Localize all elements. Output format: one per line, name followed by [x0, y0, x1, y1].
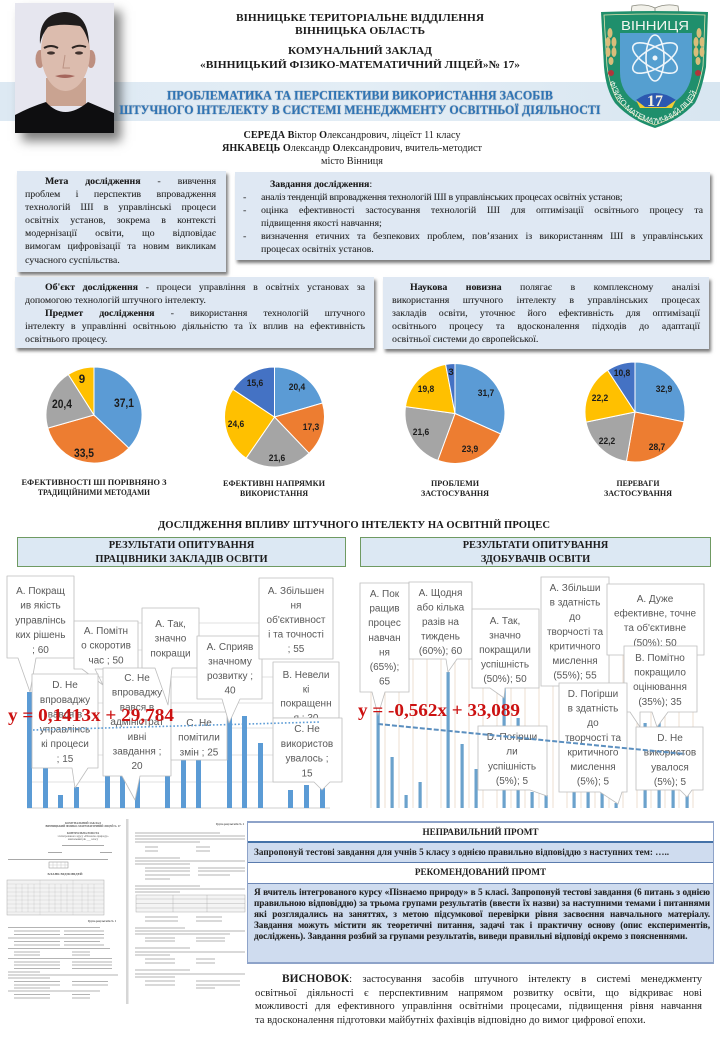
callout: was not used: використов — [644, 748, 696, 759]
callout: not used: 15 — [301, 768, 313, 779]
authors block: ЯНКАВЕЦЬ Олександр Олександрович, вчитель-методист — [222, 143, 482, 154]
callout: improved learning: навчан — [368, 633, 401, 644]
pie chart: effective directions of use: 20,4 — [289, 382, 306, 393]
pie captions: ЕФЕКТИВНОСТІ ШІ ПОРІВНЯНО З — [22, 478, 167, 487]
callout: improved learning: 65 — [379, 677, 390, 688]
heading: organisation lines: КОМУНАЛЬНИЙ ЗАКЛАД — [288, 45, 433, 57]
conclusion text — [255, 973, 702, 1026]
survey header: students: ЗДОБУВАЧІВ ОСВІТИ — [481, 554, 590, 565]
callout: not implemented in administration: впроваджу — [112, 688, 162, 699]
panel: scientific novelty — [383, 277, 709, 349]
callout: noticed no change — [171, 712, 227, 760]
panel: object and subject of research: Предмет дослідження - використання технологій штучного — [45, 308, 365, 319]
callout: contributed to development: розвитку ; — [207, 671, 253, 682]
pie chart: effective directions of use: 15,6 — [247, 378, 263, 389]
pie chart: application advantages: 22,2 — [592, 393, 608, 404]
pie captions: ВИКОРИСТАННЯ — [240, 489, 308, 498]
callout: improved performance — [472, 609, 539, 698]
callout: improved assessment: оцінювання — [633, 682, 687, 693]
row: recommended prompt text: Я вчитель інтегрованого курсу «Пізнаємо природу» в 5 класі. Запропонуй тестові завдання (6 питань з однією — [254, 887, 710, 897]
panel: scientific novelty: освітнього процесу та вдосконалення підходів до адаптації — [392, 321, 700, 332]
panel: research tasks: аналіз тенденцій впровадження технологій ШІ в управлінських процесах освітніх установ; — [261, 192, 622, 203]
callout: very effective — [607, 584, 704, 655]
callout: increased objectivity: ; 55 — [288, 644, 305, 655]
callout: saved time: А. Помітн — [84, 626, 128, 637]
test document scan: КОМУНАЛЬНИЙ ЗАКЛАД — [65, 822, 101, 825]
callout: improved decisions — [7, 576, 74, 692]
callout: improved learning: ня — [379, 647, 390, 658]
callout: not used — [273, 718, 342, 790]
heading: organisation lines — [200, 12, 520, 71]
callout: increased objectivity: ня — [291, 600, 301, 612]
row: recommended prompt text: Завдання можуть містити як теоретичні питання, задачі так і практичну основу (опис експериментів, — [254, 920, 710, 930]
authors block: СЕРЕДА Віктор Олександрович, ліцеїст 11 класу — [244, 130, 460, 141]
callout: improved learning: А. Пок — [370, 589, 400, 600]
callout: performance worsened: ли — [506, 747, 518, 758]
callout: very effective: А. Дуже — [637, 594, 674, 605]
pie chart: application problems: 21,6 — [413, 427, 429, 438]
callout: not implemented in management: впроваджу — [40, 695, 90, 706]
pie chart: application problems: 3 — [448, 367, 454, 378]
panel: research tasks: Завдання дослідження: — [270, 179, 372, 190]
callout: performance worsened: успішність — [488, 761, 536, 772]
callout: daily use: разів на — [422, 617, 459, 628]
pie chart: application advantages: 28,7 — [649, 442, 665, 453]
callout: performance worsened: (5%); 5 — [496, 776, 529, 787]
callout: significantly improved: покращи — [150, 648, 191, 659]
callout: improved decisions: управлінсь — [15, 615, 66, 626]
row: recommended prompt text: які розглядались на заняттях, з метою підсумкової перевірки рівня засвоєння навчального матеріалу. — [254, 909, 710, 919]
panel: object and subject of research: допомогою технологій штучного інтелекту. — [25, 295, 206, 306]
panel: object and subject of research: інтелекту в управлінні освітньою діяльністю та їх вплив на ефективність — [25, 321, 365, 332]
callout: was not used: D. Не — [657, 733, 683, 744]
survey header: education staff — [17, 537, 346, 567]
pie chart: effectiveness of AI vs traditional methods: 20,4 — [52, 399, 73, 411]
authors block: місто Вінниця — [321, 156, 383, 167]
callout: critical thinking worsened: творчості та — [565, 733, 621, 744]
pie chart: effective directions of use: 17,3 — [303, 422, 319, 433]
pie chart: application advantages: 22,2 — [599, 436, 615, 447]
callout: daily use — [409, 582, 472, 672]
row: recommended prompt text — [248, 883, 713, 963]
callout: daily use: (60%); 60 — [419, 646, 463, 657]
survey header: education staff: ПРАЦІВНИКИ ЗАКЛАДІВ ОСВІТИ — [95, 554, 268, 565]
callout: performance worsened — [478, 726, 547, 796]
callout: increased critical thinking: до — [569, 612, 581, 623]
pie captions: ЗАСТОСУВАННЯ — [604, 489, 672, 498]
callout: critical thinking worsened: D. Погірши — [568, 689, 618, 700]
row: recommended prompt heading: РЕКОМЕНДОВАНИЙ ПРОМТ — [415, 867, 546, 877]
emblem: lyceum shield: ВІННИЦЯ — [621, 18, 689, 33]
callout: improved performance: значно — [489, 630, 521, 642]
row: wrong prompt heading — [248, 822, 713, 843]
panel: research goal: вимогам цифровізації та новим викликам — [25, 241, 216, 252]
callout: contributed to development: 40 — [224, 686, 236, 696]
callout: critical thinking worsened: (5%); 5 — [577, 777, 610, 788]
conclusion text: можливості для ефективного управління освітніми процесами, підвищення рівня навчання — [255, 1001, 702, 1012]
callout: not implemented in administration: завдання ; — [113, 746, 161, 758]
callout: increased objectivity — [259, 578, 333, 659]
formula: staff trend line: y = 0,1413x + 29,784 — [8, 705, 174, 725]
title: poster heading: ПРОБЛЕМАТИКА ТА ПЕРСПЕКТИВИ ВИКОРИСТАННЯ ЗАСОБІВ — [167, 88, 553, 102]
test document scan — [6, 819, 246, 1004]
callout: performance worsened: D. Погірши — [487, 732, 537, 743]
pie chart: application advantages: 10,8 — [614, 368, 630, 379]
pie chart: application problems — [405, 364, 505, 463]
callout: not implemented in management: управлінсь — [40, 724, 90, 735]
panel: scientific novelty: Наукова новизна полягає в комплексному аналізі — [410, 282, 700, 293]
callout: very effective: (50%); 50 — [633, 638, 677, 649]
panel: object and subject of research: освітнього процесу. — [25, 334, 107, 345]
pie chart: application problems: 23,9 — [462, 444, 478, 455]
callout: contributed to development: значному — [208, 656, 252, 668]
callout: daily use: тиждень — [421, 632, 460, 642]
panel: scientific novelty: закладів освіти, уточнює його ефективність для оптимізації — [392, 308, 700, 319]
pie captions: ЕФЕКТИВНІ НАПРЯМКИ — [223, 479, 325, 488]
pie chart: effective directions of use: 21,6 — [269, 453, 285, 464]
panel: research tasks: оцінка ефективності застосування технологій ШІ для оптимізації освітнього процесу та — [261, 205, 703, 216]
panel: object and subject of research — [15, 277, 374, 348]
callout: noticed no change: С. Не — [186, 718, 212, 729]
callout: not implemented in administration: С. Не — [124, 673, 150, 684]
row: recommended prompt text: правильною відповіддю) за трьома групами результатів (ввести їх назви) за наступними темами і питаннями — [254, 898, 710, 908]
callout: critical thinking worsened: в здатність — [568, 704, 618, 715]
callout: was not used — [636, 727, 703, 797]
callout: increased critical thinking: (55%); 55 — [553, 671, 597, 682]
bar chart: student survey — [358, 576, 704, 808]
panel: scientific novelty: використання штучного інтелекту в управлінських процесах — [392, 295, 700, 306]
callout: improved learning — [360, 583, 409, 715]
heading: organisation lines: ВІННИЦЬКЕ ТЕРИТОРІАЛЬНЕ ВІДДІЛЕННЯ — [236, 12, 484, 24]
callout: improved performance: покращили — [479, 645, 531, 656]
callout: increased objectivity: і та точності — [268, 630, 324, 640]
callout: saved time — [74, 621, 138, 685]
callout: not implemented in administration: вався в — [120, 702, 154, 713]
panel: object and subject of research: Об'єкт дослідження - процеси управління в освітніх установах за — [45, 282, 365, 293]
row: recommended prompt heading — [248, 863, 713, 883]
callout: improved performance: А. Так, — [490, 616, 520, 627]
callout: small improvements — [273, 662, 339, 724]
pie chart: application advantages: 32,9 — [656, 384, 672, 395]
test document scan: з інтегрованого курсу «Пізнаємо природу» — [57, 835, 109, 838]
callout: increased critical thinking: творчості та — [547, 627, 603, 638]
survey header: education staff: РЕЗУЛЬТАТИ ОПИТУВАННЯ — [109, 540, 254, 551]
conclusion text: ВИСНОВОК: застосування засобів штучного інтелекту в системі менеджменту — [282, 973, 702, 985]
callout: improved decisions: ; 60 — [32, 645, 49, 656]
pie captions: ПЕРЕВАГИ — [616, 479, 660, 488]
pie chart: effectiveness of AI vs traditional methods: 37,1 — [114, 398, 135, 410]
callout: very effective: ефективне, точне — [614, 608, 696, 620]
survey header: students — [360, 537, 711, 567]
pie chart: effective directions of use — [224, 367, 325, 467]
heading: organisation lines: «ВІННИЦЬКИЙ ФІЗИКО-МАТЕМАТИЧНИЙ ЛІЦЕЙ»№ 17» — [200, 59, 520, 71]
panel: scientific novelty: освітньої системи до європейської. — [392, 334, 538, 345]
panel: research goal: Мета дослідження - вивчення — [45, 176, 216, 187]
panel: research tasks: визначення етичних та безпекових проблем, пов’язаних із використанням ШІ в управлінських — [261, 231, 703, 242]
callout: critical thinking worsened: критичного — [568, 747, 619, 758]
panel: research tasks: підвищення якості навчання; — [261, 218, 382, 229]
pie charts row — [46, 362, 684, 466]
callout: contributed to development — [197, 636, 262, 723]
row: wrong prompt text — [248, 843, 713, 863]
callout: improved learning: процес — [368, 618, 401, 629]
callout: very effective: та об'єктивне — [624, 622, 687, 634]
test document scan: навчальний рік ___ класу — [68, 838, 99, 841]
panel: research tasks — [235, 172, 710, 260]
callout: noticed no change: змін ; 25 — [180, 747, 219, 758]
panel: research goal: проблем і перспектив впровадження — [25, 189, 216, 200]
photo: author portrait — [15, 3, 114, 133]
pie chart: application problems: 19,8 — [418, 384, 434, 395]
panel: research tasks: - — [243, 192, 246, 203]
panel: research goal: освітніх установ, зокрема в контексті — [25, 215, 216, 226]
callout: not implemented in administration: ивні — [128, 732, 146, 743]
callout: contributed to development: А. Сприяв — [207, 642, 253, 653]
callout: not implemented in management — [32, 674, 98, 788]
callout: small improvements: В. Невели — [283, 670, 329, 681]
callout: increased objectivity: об'єктивност — [267, 614, 326, 626]
callout: improved decisions: ких рішень — [16, 630, 65, 641]
pie chart: application problems: 31,7 — [478, 388, 494, 399]
callout: not implemented in management: D. Не — [52, 680, 78, 691]
title banner band — [0, 82, 720, 121]
panel: research tasks: - — [243, 231, 246, 242]
panel: research goal: модернізації освіти, що відповідає — [25, 228, 216, 239]
panel: prompt comparison table — [247, 821, 714, 964]
pie chart: effective directions of use: 24,6 — [228, 419, 244, 430]
test document scan: Група результатів № 1 — [88, 920, 117, 923]
row: wrong prompt heading: НЕПРАВИЛЬНИЙ ПРОМТ — [422, 827, 539, 837]
test document scan: БЛАНК ВІДПОВІДЕЙ — [47, 871, 83, 876]
callout: not used: використов — [281, 739, 333, 750]
callout: was not used: увалося — [651, 762, 689, 773]
callout: improved learning: (65%); — [370, 662, 399, 673]
callout: improved performance: успішність — [481, 660, 529, 670]
callout: improved assessment — [624, 646, 697, 727]
row: wrong prompt text: Запропонуй тестові завдання для учнів 5 класу з однією правильно відповіддю з наступних тем: ….. — [254, 847, 669, 857]
survey header: students: РЕЗУЛЬТАТИ ОПИТУВАННЯ — [463, 540, 608, 551]
pie captions: ТРАДИЦІЙНИМИ МЕТОДАМИ — [38, 488, 150, 497]
panel: research tasks: - — [243, 205, 246, 216]
callout: was not used: (5%); 5 — [654, 777, 687, 788]
callout: increased objectivity: А. Збільшен — [268, 585, 324, 597]
pie captions: ЗАСТОСУВАННЯ — [421, 489, 489, 498]
pie captions: ПРОБЛЕМИ — [431, 479, 479, 488]
callout: significantly improved: А. Так, — [155, 619, 186, 630]
emblem: lyceum shield: ФІЗИКО-МАТЕМАТИЧНИЙ ЛІЦЕЙ — [610, 81, 697, 124]
title: poster heading — [120, 88, 600, 117]
bar chart: staff survey — [6, 576, 342, 808]
callout: critical thinking worsened — [559, 683, 627, 804]
callout: improved decisions: ив якість — [20, 601, 61, 612]
pie chart: effectiveness of AI vs traditional methods — [46, 367, 142, 463]
test document scan: КОНТРОЛЬНА РОБОТА — [67, 832, 99, 835]
heading: organisation lines: ВІННИЦЬКА ОБЛАСТЬ — [295, 25, 425, 37]
test document scan: ВІННИЦЬКИЙ ФІЗИКО-МАТЕМАТИЧНИЙ ЛІЦЕЙ № 17 — [45, 825, 121, 828]
formula: student trend line: y = -0,562x + 33,089 — [358, 700, 520, 720]
section heading: ДОСЛІДЖЕННЯ ВПЛИВУ ШТУЧНОГО ІНТЕЛЕКТУ НА ОСВІТНІЙ ПРОЦЕС — [158, 519, 550, 531]
callout: improved decisions: А. Покращ — [16, 586, 65, 597]
callout: improved performance: (50%); 50 — [483, 674, 527, 685]
conclusion text: освітньої діяльності є перспективним напрямом розвитку освіти, що відкриває нові — [255, 988, 702, 999]
panel: research goal: сучасного суспільства. — [25, 255, 120, 266]
callout: increased critical thinking: критичного — [550, 641, 601, 652]
panel: research tasks: процесах освітніх установ. — [261, 244, 374, 255]
emblem: lyceum shield: 17 — [647, 93, 663, 110]
callout: noticed no change: помітили — [178, 733, 220, 744]
callout: not used: С. Не — [294, 724, 320, 735]
callout: daily use: А. Щодня — [419, 588, 462, 599]
callout: critical thinking worsened: мислення — [570, 762, 616, 773]
callout: not implemented in management: вався в — [48, 710, 82, 721]
authors block — [222, 130, 482, 167]
callout: improved assessment: В. Помітно — [635, 653, 685, 664]
panel: research goal: технологій ШІ в управлінські процеси — [25, 202, 216, 213]
callout: small improvements: покращенн — [280, 699, 332, 710]
row: recommended prompt text: досліджень). Завдання розбий за групами результатів, виведи правильні відповіді окремо з поясненнями. — [254, 931, 687, 941]
callout: significantly improved — [142, 608, 199, 705]
panel: research goal — [17, 171, 226, 272]
callout: critical thinking worsened: до — [587, 718, 599, 729]
pie chart: application advantages — [585, 362, 685, 462]
title: poster heading: ШТУЧНОГО ІНТЕЛЕКТУ В СИСТЕМІ МЕНЕДЖМЕНТУ ОСВІТНЬОЇ ДІЯЛЬНОСТІ — [120, 102, 600, 117]
callout: increased critical thinking — [541, 577, 609, 686]
callout: not implemented in management: ; 15 — [57, 754, 74, 765]
emblem: lyceum shield — [601, 4, 708, 128]
callout: small improvements: кі — [303, 684, 309, 695]
callout: not implemented in administration: адміністрат — [110, 717, 164, 728]
callout: improved learning: ращив — [369, 604, 400, 615]
test document scan: Група результатів № 2 — [216, 823, 245, 826]
callout: not implemented in administration — [103, 668, 171, 800]
conclusion text: та вдосконалення підготовки майбутніх фахівців відповідно до вимог цифрової епохи. — [255, 1015, 646, 1026]
callout: significantly improved: значно — [155, 634, 187, 645]
pie captions — [22, 478, 672, 498]
pie chart: effectiveness of AI vs traditional methods: 33,5 — [74, 448, 95, 460]
callout: not used: увалось ; — [285, 754, 329, 765]
callout: not implemented in administration: 20 — [131, 761, 143, 772]
callout: increased critical thinking: А. Збільши — [550, 582, 600, 594]
callout: increased critical thinking: мислення — [552, 656, 598, 667]
callout: increased critical thinking: в здатність — [550, 598, 600, 609]
callout: improved assessment: покращило — [634, 668, 686, 679]
callout: daily use: або кілька — [417, 602, 465, 614]
callout: improved assessment: (35%); 35 — [638, 697, 682, 708]
callout: not implemented in management: кі процеси — [41, 739, 89, 750]
callout: saved time: час ; 50 — [88, 655, 124, 666]
callout: small improvements: я ; 30 — [294, 713, 319, 724]
callout: saved time: о скоротив — [81, 641, 131, 652]
pie chart: effectiveness of AI vs traditional methods: 9 — [79, 374, 85, 386]
